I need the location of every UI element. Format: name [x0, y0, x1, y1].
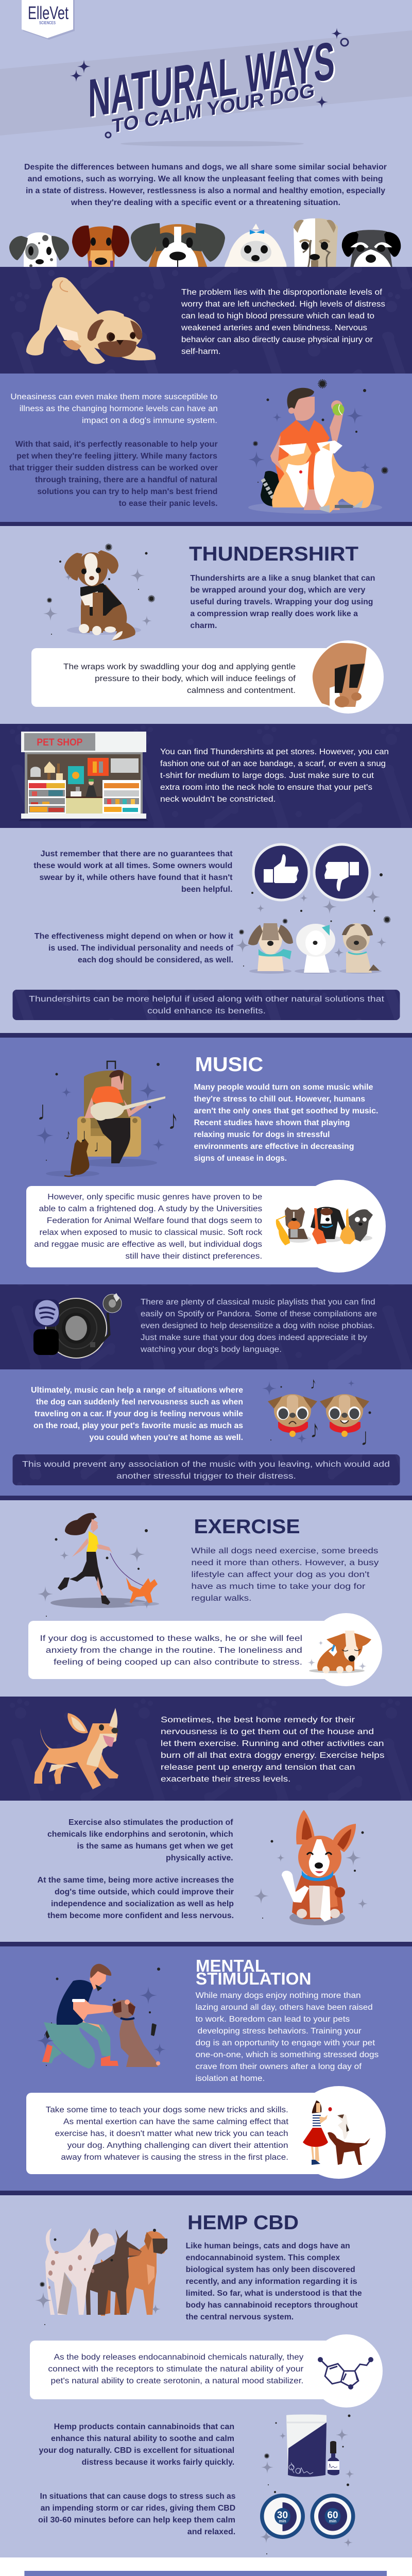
- text: mental stimulation: [196, 1991, 379, 2083]
- text: pet stores: You can find Thundershirts at pet stores. However, you can: [160, 748, 389, 756]
- text: home remedy: exacerbate their stress levels.: [161, 1775, 290, 1784]
- text: independence: [37, 1876, 234, 1920]
- text: reasonable to help: With that said, it's perfectly reasonable to help your: [15, 440, 218, 449]
- text: exercise intro: need it more than others. However, a busy: [191, 1558, 379, 1567]
- text: music situations: Ultimately, music can help a range of situations where: [31, 1386, 243, 1395]
- text: uneasiness: Uneasiness can even make them more susceptible to: [10, 393, 217, 401]
- icon: sad dog head: [268, 1394, 317, 1437]
- icon: wrapped dog legs: [313, 643, 367, 707]
- callout: serotonin: pet's natural ability to create serotonin, a natural mood stabilizer.: [50, 2377, 303, 2385]
- text: hemp intro: the central nervous system.: [186, 2313, 294, 2321]
- text: problem: can lead to high blood pressure which can lead to: [181, 312, 374, 320]
- icon: dachshund: [72, 226, 129, 268]
- text: pet stores: [160, 748, 389, 804]
- text: pet stores: neck wouldn't be constricted.: [160, 795, 276, 804]
- text: mental stimulation: to work. Boredom can lead to your pets: [196, 2015, 350, 2024]
- text: playlists: [140, 1298, 377, 1354]
- text: reasonable to help: [9, 440, 218, 508]
- icon: schnauzer: [342, 230, 401, 268]
- callout: music genres: and reggae music are effective as well, but individual dogs: [34, 1240, 262, 1249]
- text: hemp intro: recently, and any information regarding it is: [186, 2277, 357, 2286]
- callout: wraps: calmness and contentment.: [187, 686, 296, 695]
- text: music intro: relaxing music for dogs in stressful: [194, 1130, 330, 1139]
- decorative notes and sparkles: heads: [262, 1379, 371, 1445]
- heading: exercise: EXERCISE: [194, 1516, 300, 1538]
- callout: loneliness: anxiety from the change in the routine. The loneliness and: [46, 1646, 302, 1655]
- panel: about ellevet: [24, 2571, 387, 2576]
- intro text: when they're dealing with a specific event or a threatening situation.: [71, 198, 340, 207]
- callout: prevent association: another stressful trigger to their distress.: [116, 1472, 296, 1481]
- text: thundershirt intro: useful during travels. Wrapping your dog using: [190, 598, 373, 606]
- logo shield: SCIENCES: [39, 21, 56, 25]
- text: no guarantees: been helpful.: [181, 885, 233, 894]
- logo shield: [22, 0, 75, 40]
- decorative sparkles: thumbs: [235, 873, 390, 967]
- text: exercise intro: have as much time to take your dog for: [191, 1582, 365, 1591]
- callout: loneliness: feeling of being cooped up can also contribute to stress.: [54, 1658, 302, 1667]
- icon: woman and dogs trick: [303, 2100, 370, 2165]
- text: problem: worry that are left unchecked. High levels of distress: [181, 300, 385, 309]
- decorative notes and sparkles: music: [36, 1063, 176, 1161]
- corgi left: [272, 443, 312, 507]
- text: exercise intro: While all dogs need exercise, some breeds: [191, 1547, 379, 1555]
- heading: thundershirt: THUNDERSHIRT: [189, 543, 358, 565]
- dog with scarf: [248, 923, 293, 971]
- text: hemp intro: endocannabinoid system. This complex: [186, 2253, 340, 2262]
- intro text: [24, 163, 387, 207]
- text: hemp products: Hemp products contain cannabinoids that can: [54, 2422, 234, 2431]
- text: playlists: Just make sure that your dog does indeed appreciate it by: [141, 1333, 367, 1342]
- callout: thundershirt helper: could enhance its benefits.: [147, 1007, 266, 1015]
- text: hemp products: enhance this natural ability to soothe and calm: [51, 2434, 234, 2443]
- text: problem: self-harm.: [181, 347, 220, 356]
- text: endorphins: Exercise also stimulates the production of: [68, 1818, 233, 1827]
- icon: st bernard: [131, 223, 225, 268]
- decorative sparkles: uneasiness: [248, 379, 388, 483]
- text: endorphins: chemicals like endorphins and serotonin, which: [47, 1830, 233, 1839]
- panel: music: [0, 1038, 412, 1284]
- text: no guarantees: these would work at all times. Some owners would: [33, 861, 232, 870]
- decorative sparkles: standing dogs: [35, 2229, 161, 2325]
- decorative sparkles: waving dog: [253, 1831, 368, 1919]
- corgi right: [315, 448, 374, 513]
- icon: three standing dogs: [45, 2228, 167, 2316]
- heading: hemp cbd: HEMP CBD: [187, 2212, 299, 2234]
- icon: dog band: [277, 1207, 373, 1245]
- left shelves: [28, 780, 66, 814]
- icon: 30 minute timer: [260, 2494, 305, 2539]
- text: mental stimulation: crave from their owners after a long day of: [196, 2062, 362, 2071]
- text: music intro: environments are effective in decreasing: [194, 1142, 354, 1151]
- callout: prevent association: This would prevent any association of the music with you leaving, which would add: [22, 1460, 390, 1469]
- text: playlists: easily on Spotify or Pandora. Some of these compilations are: [141, 1310, 377, 1318]
- text: no guarantees: Just remember that there are no guarantees that: [41, 850, 233, 858]
- heading: mental stimulation: [196, 1956, 311, 1988]
- text: hemp intro: Like human beings, cats and dogs have an: [186, 2242, 350, 2250]
- text: pet stores: fashion one out of an ace bandage, a scarf, or even a snug: [160, 759, 386, 768]
- title: TO CALM YOUR DOG: [112, 79, 315, 138]
- text: thundershirt intro: charm.: [190, 621, 217, 630]
- callout: thundershirt helper: [12, 990, 400, 1020]
- title sparkles: [70, 28, 348, 138]
- decorative sparkles: cbd products: [260, 2414, 354, 2554]
- text: problem: [181, 288, 385, 356]
- text: reasonable to help: that trigger their sudden distress can be worked over: [9, 464, 218, 472]
- text: situations to stress: and relaxed.: [187, 2528, 235, 2536]
- text: reasonable to help: through training, there are a handful of natural: [35, 476, 217, 484]
- decorative sparkles: exercise: [38, 1529, 152, 1617]
- text: exercise intro: regular walks.: [191, 1594, 251, 1603]
- text: hemp intro: biological system has only been discovered: [186, 2265, 355, 2274]
- text: home remedy: nervousness is to get them out of the house and: [161, 1727, 374, 1736]
- boxer: [101, 2231, 167, 2316]
- text: home remedy: [161, 1716, 385, 1784]
- panel: worry problem: [0, 267, 412, 374]
- text: independence: dog's time outside, which could improve their: [55, 1888, 234, 1896]
- text: home remedy: release pent up energy and tension that can: [161, 1763, 355, 1772]
- intro text: in a state of distress. However, restlessness is also a normal and healthy emotion, especially: [26, 187, 385, 195]
- text: music situations: traveling on a car. If your dog is feeling nervous while: [35, 1410, 243, 1418]
- callout: prevent association: [12, 1454, 400, 1485]
- callout: music genres: Federation for Animal Welfare found that dogs seem to: [47, 1216, 262, 1225]
- dalmatian: [45, 2228, 115, 2315]
- callout: teach tricks: away from whatever is causing the stress in the first place.: [61, 2153, 288, 2162]
- text: music intro: signs of unease in dogs.: [194, 1154, 287, 1163]
- icon: pandora tile: [33, 1329, 59, 1355]
- icon: person with corgis: [248, 388, 382, 514]
- decorative sparkles: vest dog: [43, 544, 155, 635]
- text: thundershirt intro: be wrapped around your dog, which are very: [190, 586, 366, 595]
- callout: music genres: [26, 1180, 386, 1273]
- text: uneasiness: [10, 393, 218, 425]
- icon: spotify: [33, 1299, 59, 1327]
- text: mental stimulation: While many dogs enjoy nothing more than: [196, 1991, 361, 2000]
- divider bar: [0, 1942, 412, 1946]
- text: effectiveness: [35, 932, 234, 964]
- icon: maltese: [225, 224, 286, 268]
- text: endorphins: physically active.: [166, 1854, 233, 1862]
- text: thundershirt intro: [190, 574, 375, 630]
- text: mental stimulation: one-on-one, which is something stressed dogs: [196, 2050, 379, 2059]
- icon: wrinkly dog: [294, 218, 338, 268]
- icon: guitarist with dog: [46, 1061, 165, 1177]
- callout: teach tricks: Take some time to teach your dogs some new tricks and skills.: [46, 2106, 288, 2114]
- text: music intro: aren't the only ones that get soothed by music.: [194, 1107, 378, 1115]
- text: home remedy: Sometimes, the best home remedy for their: [161, 1716, 355, 1724]
- icon: serotonin molecule: [318, 2357, 373, 2389]
- divider bar: [0, 1033, 412, 1038]
- poodle: [296, 924, 335, 973]
- text: thundershirt intro: a compression wrap really does work like a: [190, 609, 358, 618]
- heading: mental stimulation: MENTAL: [196, 1956, 265, 1975]
- icon: pet shop: PET SHOP: [37, 737, 83, 748]
- text: mental stimulation: dog is an opportunity to engage with your pet: [196, 2039, 375, 2047]
- text: playlists: watching your dog's body language.: [140, 1345, 282, 1354]
- icon: pet shop: [19, 732, 148, 821]
- title: TO CALM YOUR DOG: [113, 80, 316, 139]
- text: exercise intro: lifestyle can affect your dog as you don't: [191, 1570, 370, 1579]
- row of dog heads: [9, 218, 401, 268]
- icon: dalmatian: [9, 232, 69, 268]
- icon: woman walking dog: [50, 1513, 159, 1608]
- divider bar: [0, 1496, 412, 1500]
- text: reasonable to help: pet when they're feeling jittery. While many factors: [16, 452, 217, 461]
- text: problem: behavior can also directly cause physical injury or: [181, 335, 373, 344]
- callout: serotonin: As the body releases endocannabinoid chemicals naturally, they: [54, 2353, 304, 2362]
- icon: turntable: [33, 1293, 122, 1359]
- doberman: [85, 2229, 142, 2315]
- icon: 30 minute timer: min: [279, 2519, 286, 2523]
- callout: music genres: still have their distinct preferences.: [125, 1252, 262, 1261]
- panel: mental stimulation: [0, 1946, 412, 2191]
- text: mental stimulation: developing stress behaviors. Training your: [198, 2027, 362, 2036]
- heading: mental stimulation: STIMULATION: [196, 1969, 311, 1988]
- text: independence: independence and socialization as well as help: [51, 1900, 234, 1908]
- pug seated: [342, 923, 380, 973]
- text: home remedy: burn off all that extra doggy energy. Exercise helps: [161, 1751, 385, 1760]
- text: endorphins: [47, 1818, 233, 1862]
- panel: uneasiness: [0, 374, 412, 522]
- text: effectiveness: each dog should be considered, as well.: [78, 956, 233, 964]
- text: music intro: [194, 1083, 378, 1163]
- callout: music genres: However, only specific music genres have proven to be: [47, 1193, 262, 1201]
- text: music intro: they're stress to chill out. However, humans: [194, 1095, 365, 1104]
- callout: wraps: [31, 640, 384, 714]
- logo shield: ElleVet: [28, 3, 68, 23]
- text: music situations: on the road, play your pet's favorite music as much as: [33, 1421, 243, 1430]
- callout: serotonin: connect with the receptors to stimulate the natural ability of your: [48, 2365, 303, 2374]
- text: mental stimulation: isolation at home.: [196, 2074, 265, 2083]
- callout: wraps: pressure to their body, which will induce feelings of: [95, 674, 296, 683]
- text: pet stores: extra room into the neck hole to ensure that your pet's: [160, 783, 372, 792]
- text: independence: them become more confident and less nervous.: [47, 1911, 234, 1920]
- text: reasonable to help: solutions you can try to help man's best friend: [37, 487, 217, 496]
- callout: teach tricks: [26, 2086, 386, 2179]
- text: problem: The problem lies with the disproportionate levels of: [181, 288, 383, 297]
- callout: serotonin: [30, 2334, 383, 2408]
- icon: lonely dog: [307, 1631, 371, 1673]
- text: music intro: Recent studies have shown that playing: [194, 1118, 350, 1127]
- text: situations to stress: oil 30-60 minutes before can help keep them calm: [38, 2516, 235, 2524]
- text: hemp intro: body has cannabinoid receptors throughout: [186, 2301, 358, 2310]
- text: no guarantees: swear by it, while others have found that it hasn't: [39, 873, 233, 882]
- text: home remedy: let them exercise. Running and other activities can: [161, 1739, 384, 1748]
- callout: wraps: The wraps work by swaddling your dog and applying gentle: [63, 663, 296, 671]
- text: music intro: Many people would turn on some music while: [194, 1083, 373, 1092]
- text: no guarantees: [33, 850, 233, 894]
- decorative sparkles: man with dog: [37, 1968, 166, 2066]
- divider bar: [0, 522, 412, 526]
- text: independence: At the same time, being more active increases the: [37, 1876, 234, 1885]
- text: situations to stress: In situations that can cause dogs to stress such as: [40, 2492, 236, 2501]
- icon: man with dog: [42, 1964, 160, 2069]
- panel: playlists: [0, 1284, 412, 1369]
- text: mental stimulation: lazing around all day, others have been raised: [196, 2003, 373, 2012]
- icon: pug: [26, 277, 156, 364]
- icon: thumbs up: [253, 844, 309, 900]
- text: playlists: There are plenty of classical music playlists that you can find: [141, 1298, 375, 1307]
- text: hemp intro: [186, 2242, 362, 2321]
- callout: loneliness: If your dog is accustomed to these walks, he or she will feel: [40, 1634, 302, 1643]
- text: playlists: even designed to help desensitize a dog with noise phobias.: [141, 1321, 375, 1330]
- text: exercise intro: [191, 1547, 379, 1603]
- icon: three seated dogs: [248, 923, 382, 974]
- icon: chihuahua: [34, 1708, 118, 1789]
- text: situations to stress: an impending storm or car rides, giving them CBD: [41, 2504, 235, 2513]
- text: uneasiness: illness as the changing hormone levels can have an: [20, 404, 218, 413]
- text: pet stores: t-shirt for medium to large dogs. Just make sure to cut: [160, 771, 374, 780]
- footer white area: [0, 2557, 412, 2576]
- intro text: Despite the differences between humans and dogs, we all share some similar social behavior: [24, 163, 387, 172]
- divider bar: [0, 2191, 412, 2195]
- panel: music range: [0, 1369, 412, 1496]
- text: effectiveness: The effectiveness might depend on when or how it: [35, 932, 233, 941]
- title shadow: [121, 141, 304, 146]
- text: hemp products: [39, 2422, 234, 2467]
- text: situations to stress: [38, 2492, 236, 2536]
- text: effectiveness: is used. The individual personality and needs of: [48, 944, 234, 953]
- callout: music genres: relax when exposed to music to classical music. Soft rock: [39, 1228, 262, 1237]
- icon: cbd pack and bottle: [286, 2414, 339, 2477]
- intro text: and emotions, such as worrying. We all know the unpleasant feeling that comes with being: [28, 175, 383, 183]
- text: reasonable to help: to ease their panic levels.: [119, 499, 218, 508]
- callout: loneliness: [28, 1613, 382, 1686]
- callout: music genres: able to calm a frightened dog. A study by the Universities: [39, 1205, 262, 1213]
- icon: happy dog head: [320, 1394, 369, 1437]
- icon: 60 minute timer: 60: [327, 2510, 338, 2521]
- text: hemp products: distress because it works fairly quickly.: [82, 2458, 234, 2467]
- icon: thumbs down: [314, 844, 370, 900]
- callout: teach tricks: As mental exertion can have the same calming effect that: [63, 2117, 289, 2126]
- text: endorphins: is the same as humans get when we get: [77, 1842, 233, 1851]
- title: [88, 30, 336, 139]
- icon: waving dog: [282, 1810, 356, 1925]
- text: thundershirt intro: Thundershirts are a like a snug blanket that can: [190, 574, 375, 583]
- text: uneasiness: impact on a dog's immune system.: [82, 416, 217, 425]
- icon: 60 minute timer: min: [329, 2519, 336, 2523]
- panel: home remedy: [0, 1697, 412, 1801]
- text: hemp products: your dog naturally. CBD is excellent for situational: [39, 2446, 234, 2455]
- panel: pet shop: [0, 724, 412, 828]
- callout: teach tricks: your dog. Anything challenging can divert their attention: [67, 2141, 288, 2150]
- header panel: [0, 0, 412, 146]
- callout: thundershirt helper: Thundershirts can be more helpful if used along with other natural solutions that: [29, 995, 385, 1004]
- icon: 60 minute timer: [310, 2494, 355, 2539]
- callout: teach tricks: exercise has, it doesn't matter what new trick you can teach: [55, 2129, 288, 2138]
- icon: 30 minute timer: 30: [277, 2510, 288, 2521]
- text: music situations: you could when you're at home as well.: [90, 1433, 243, 1442]
- text: music situations: [31, 1386, 243, 1442]
- right shelves: [102, 780, 141, 814]
- text: music situations: the dog can suddenly feel nervousness such as when: [36, 1398, 243, 1406]
- icon: dog wearing vest: [64, 550, 141, 640]
- text: problem: weakened arteries and even blindness. Nervous: [181, 324, 367, 332]
- text: hemp intro: limited. So far, what is understood is that the: [186, 2289, 362, 2298]
- heading: music: MUSIC: [195, 1054, 263, 1076]
